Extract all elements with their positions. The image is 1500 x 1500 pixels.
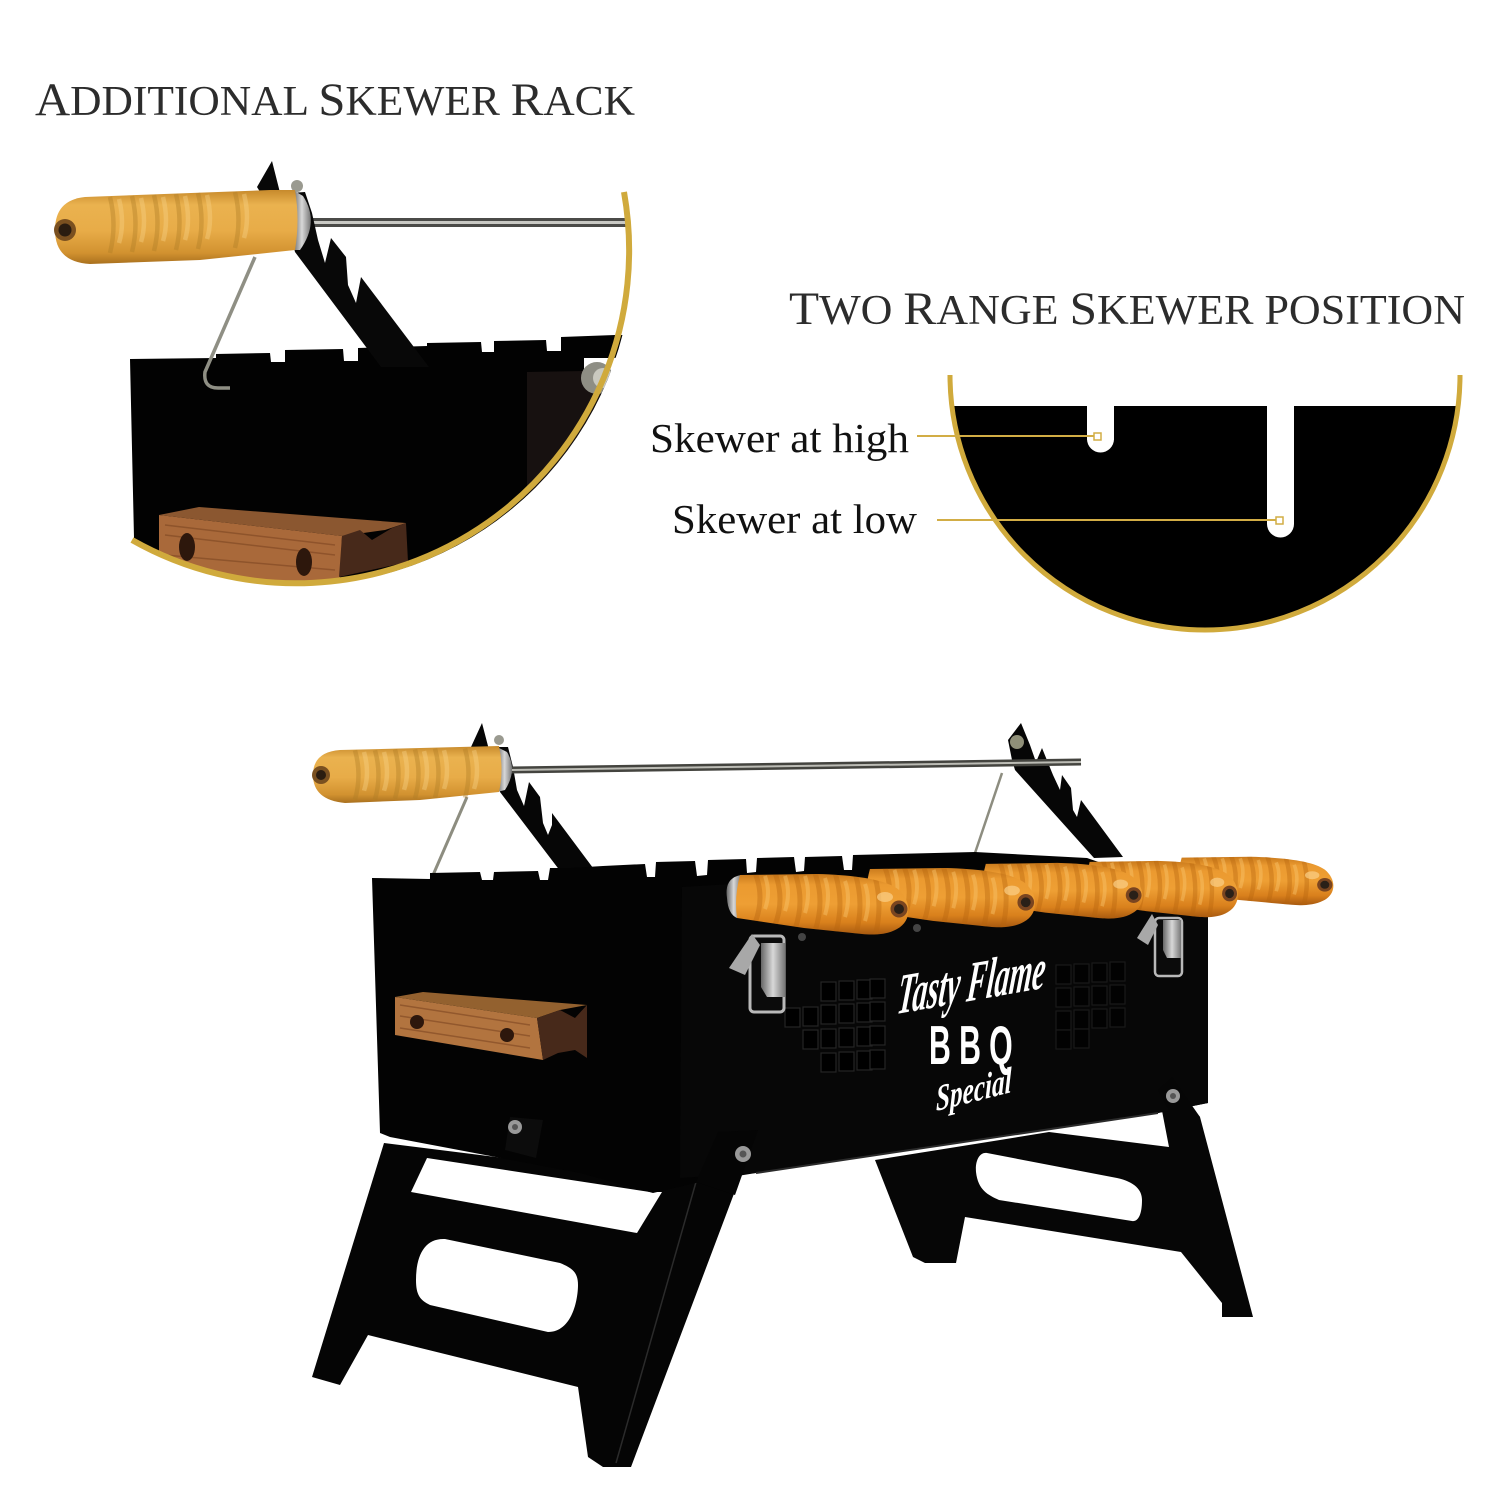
label: skewer at high xyxy=(650,415,1101,461)
label: skewer at low xyxy=(672,496,1283,542)
skewer handle xyxy=(54,190,311,264)
heading: additional skewer rack: ADDITIONAL SKEWER RACK xyxy=(35,74,635,126)
logo xyxy=(895,937,1049,1119)
latches xyxy=(729,914,1182,1012)
label: skewer at low: Skewer at low xyxy=(672,496,917,542)
grill box xyxy=(372,852,1208,1195)
screws xyxy=(505,1077,1200,1195)
rack arms xyxy=(429,723,1123,899)
black slotted plate xyxy=(954,406,1456,628)
vents xyxy=(785,962,1125,1072)
skewer handles xyxy=(312,735,1333,937)
gold arc xyxy=(950,375,1460,630)
panel: additional skewer rack detail xyxy=(54,161,640,600)
logo: BBQ xyxy=(929,1016,1021,1076)
front legs xyxy=(312,1130,758,1467)
rack arm xyxy=(257,161,429,367)
panel: skewer slot diagram xyxy=(650,375,1470,646)
back legs xyxy=(875,1085,1253,1317)
illustration: bbq grill xyxy=(312,723,1333,1467)
label: skewer at high: Skewer at high xyxy=(650,415,909,461)
wire stay xyxy=(205,257,255,388)
wooden side handle xyxy=(395,992,587,1060)
heading: two range skewer position: TWO RANGE SKEWER POSITION xyxy=(789,283,1465,335)
skewer rod xyxy=(312,218,626,227)
gold arc xyxy=(132,192,629,583)
logo: Tasty Flame xyxy=(895,937,1049,1027)
rack box close-up xyxy=(130,335,622,580)
logo: Special xyxy=(936,1058,1012,1119)
wooden side handle xyxy=(159,507,408,580)
skewer rod xyxy=(510,762,1081,770)
